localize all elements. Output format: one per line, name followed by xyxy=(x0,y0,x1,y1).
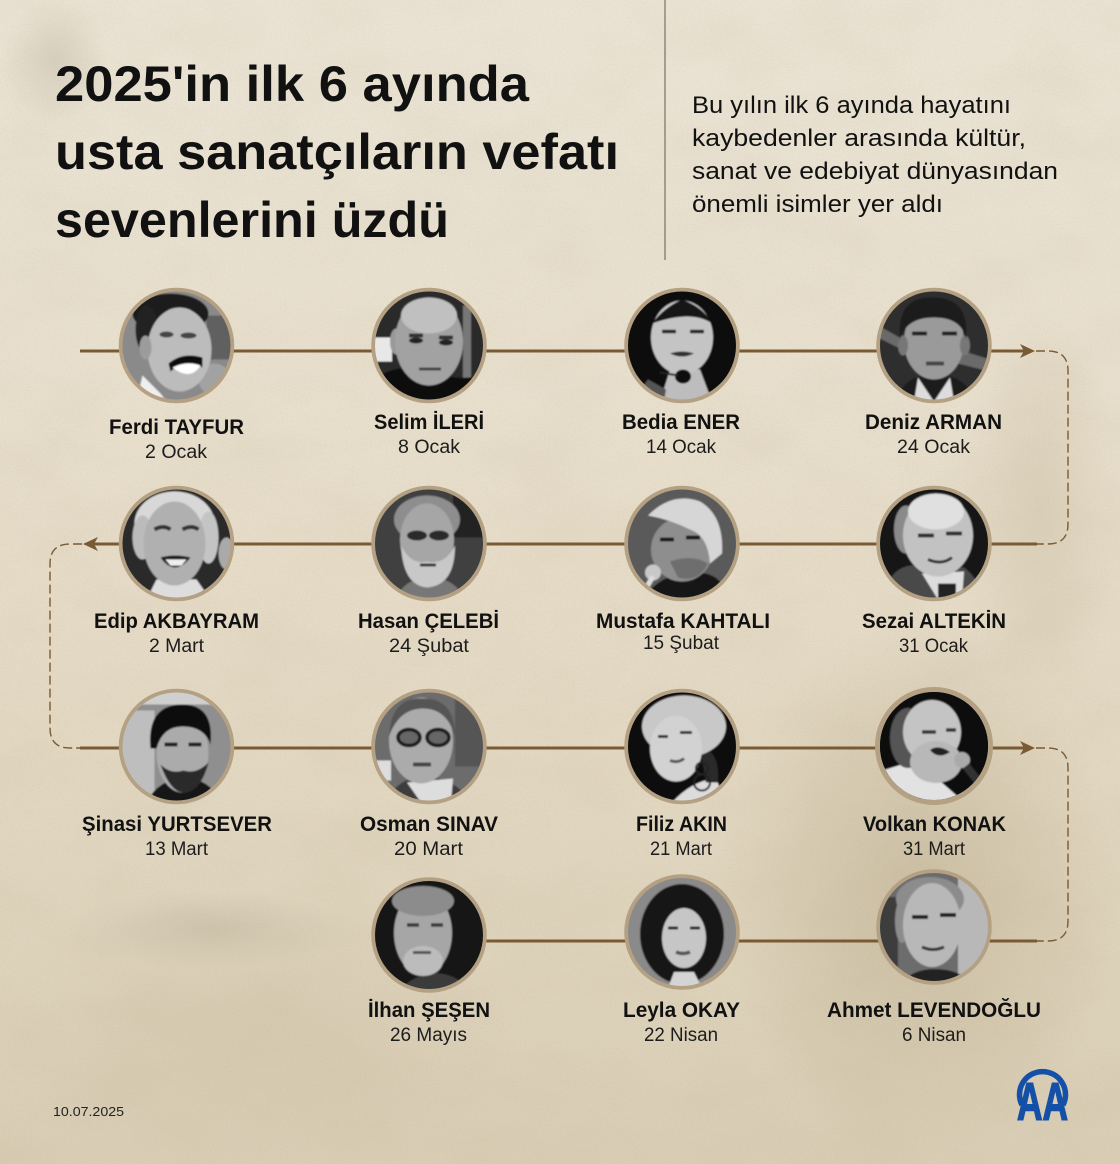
photo xyxy=(878,690,990,802)
vertical divider xyxy=(664,0,666,260)
name: Filiz AKIN xyxy=(636,813,727,836)
name: Ferdi TAYFUR xyxy=(109,416,244,439)
name: Edip AKBAYRAM xyxy=(94,610,259,633)
date: 24 Ocak xyxy=(897,437,971,458)
photo xyxy=(626,876,738,988)
person: Deniz ARMAN xyxy=(865,290,1002,458)
name: Hasan ÇELEBİ xyxy=(358,610,499,633)
person: Leyla OKAY xyxy=(623,876,740,1046)
person: Edip AKBAYRAM xyxy=(94,488,259,657)
person: Ferdi TAYFUR xyxy=(109,290,244,463)
photo xyxy=(373,879,485,991)
timeline connector with arrows xyxy=(50,344,1068,941)
person: Volkan KONAK xyxy=(863,690,1006,860)
person: Bedia ENER xyxy=(622,290,740,458)
person: İlhan ŞEŞEN xyxy=(368,879,490,1046)
date: 24 Şubat xyxy=(389,636,470,657)
photo xyxy=(373,690,485,802)
date: 31 Mart xyxy=(903,839,966,860)
photo xyxy=(120,488,234,600)
name: Deniz ARMAN xyxy=(865,411,1002,434)
person: Şinasi YURTSEVER xyxy=(82,690,272,860)
date stamp: 10.07.2025 xyxy=(53,1104,124,1119)
person: Sezai ALTEKİN xyxy=(862,488,1006,657)
person: Hasan ÇELEBİ xyxy=(358,488,499,657)
date: 2 Mart xyxy=(149,636,205,657)
intro text: Bu yılın ilk 6 ayında hayatını xyxy=(692,92,1011,119)
date: 6 Nisan xyxy=(902,1025,966,1046)
logo: AA: AA xyxy=(1017,1073,1068,1132)
photo xyxy=(878,871,990,983)
name: Ahmet LEVENDOĞLU xyxy=(827,998,1041,1022)
photo xyxy=(120,690,232,802)
name: Şinasi YURTSEVER xyxy=(82,813,272,836)
intro text: kaybedenler arasında kültür, xyxy=(692,125,1026,152)
date: 15 Şubat xyxy=(643,633,720,654)
date: 14 Ocak xyxy=(646,437,716,458)
name: İlhan ŞEŞEN xyxy=(368,999,490,1022)
person: Filiz AKIN xyxy=(626,690,738,860)
date: 8 Ocak xyxy=(398,437,461,458)
person: Selim İLERİ xyxy=(373,290,485,458)
intro text xyxy=(692,92,1058,218)
name: Leyla OKAY xyxy=(623,999,740,1022)
date: 21 Mart xyxy=(650,839,713,860)
title xyxy=(55,56,619,248)
date: 26 Mayıs xyxy=(390,1025,467,1046)
date: 13 Mart xyxy=(145,839,209,860)
name: Sezai ALTEKİN xyxy=(862,610,1006,633)
photo xyxy=(373,290,485,402)
photo xyxy=(120,290,232,402)
intro text: önemli isimler yer aldı xyxy=(692,191,943,218)
person: Mustafa KAHTALI xyxy=(596,488,770,654)
person: Osman SINAV xyxy=(360,690,498,860)
date: 20 Mart xyxy=(394,839,464,860)
name: Volkan KONAK xyxy=(863,813,1006,836)
photo xyxy=(626,690,738,802)
name: Mustafa KAHTALI xyxy=(596,610,770,633)
photo xyxy=(626,488,738,600)
person: Ahmet LEVENDOĞLU xyxy=(827,871,1041,1046)
title: 2025'in ilk 6 ayında xyxy=(55,56,530,112)
name: Selim İLERİ xyxy=(374,411,484,434)
photo xyxy=(878,290,990,402)
title: sevenlerini üzdü xyxy=(55,192,449,248)
intro text: sanat ve edebiyat dünyasından xyxy=(692,158,1058,185)
name: Bedia ENER xyxy=(622,411,740,434)
photo xyxy=(373,488,485,600)
logo: AA xyxy=(1017,1072,1068,1132)
date: 22 Nisan xyxy=(644,1025,718,1046)
title: usta sanatçıların vefatı xyxy=(55,124,619,180)
photo xyxy=(878,488,990,600)
photo xyxy=(626,290,738,402)
date: 2 Ocak xyxy=(145,442,208,463)
date: 31 Ocak xyxy=(899,636,968,657)
name: Osman SINAV xyxy=(360,813,498,836)
